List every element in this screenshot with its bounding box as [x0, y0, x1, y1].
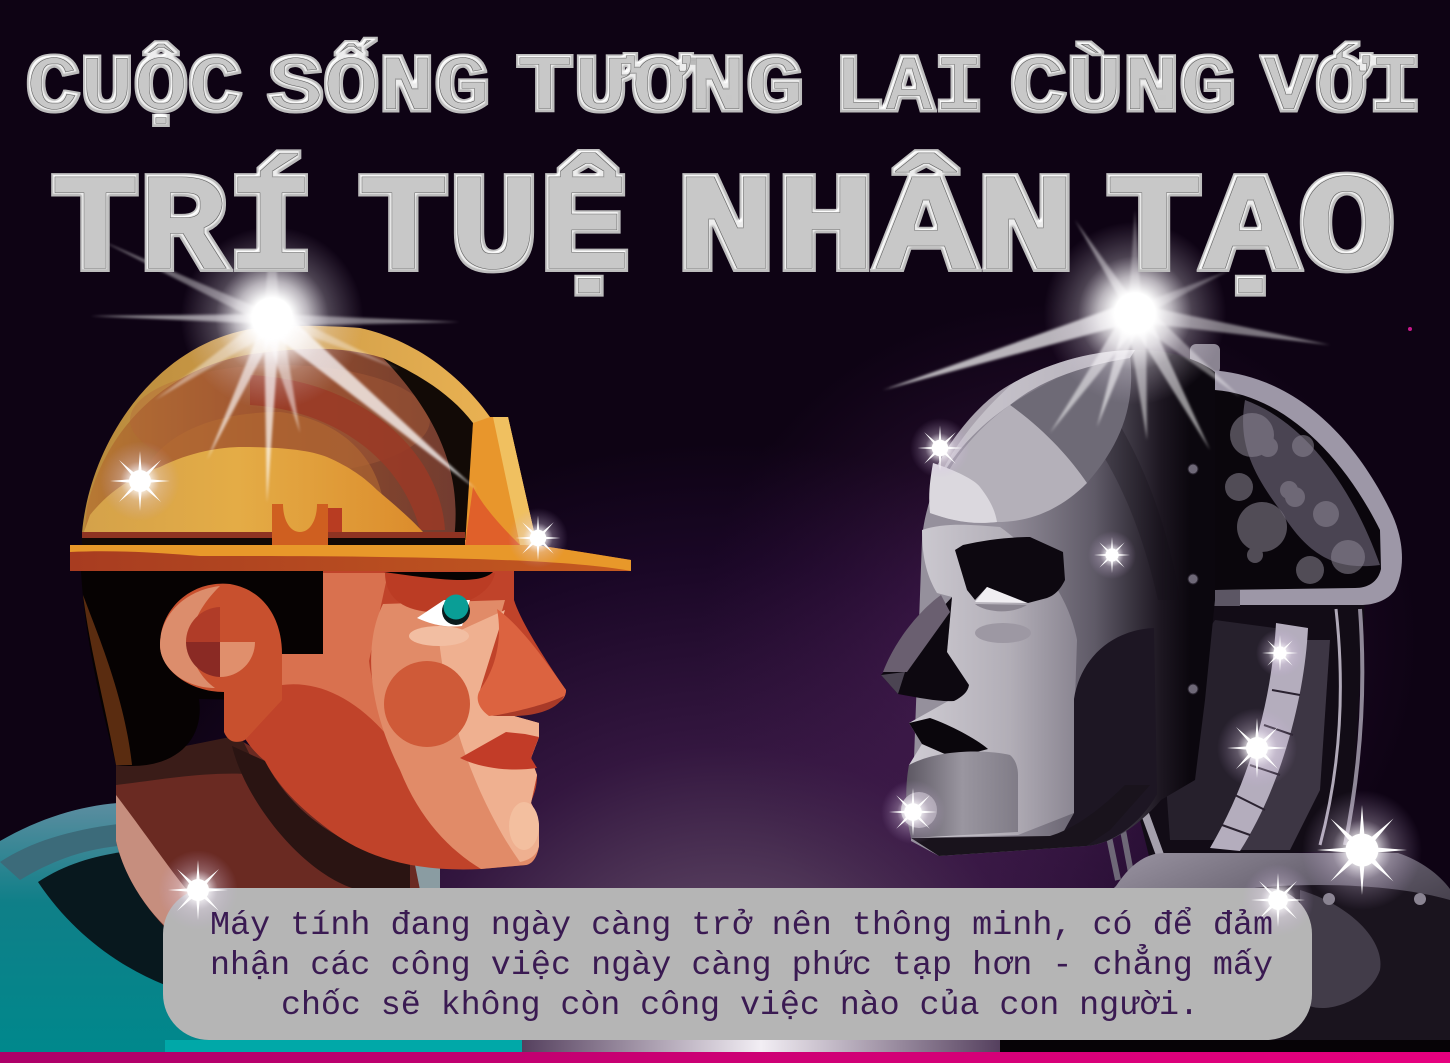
title: second line: NHÂN [676, 153, 1076, 310]
title: first line [26, 38, 1422, 135]
title: first line: VỚI [1262, 42, 1422, 135]
callout text [210, 906, 1273, 1025]
title: first line: LAI [834, 44, 984, 135]
sparkle stars [100, 418, 1422, 910]
illustration: robot [881, 344, 1450, 1052]
robot shoulder [1000, 853, 1450, 1052]
light flare: helmet [90, 200, 477, 503]
robot lens top [1010, 355, 1131, 483]
lips [460, 732, 539, 770]
robot helmet back [1190, 344, 1402, 606]
ear [160, 584, 282, 742]
bottom strip [522, 1040, 1450, 1052]
bottom pink bar [0, 1052, 1450, 1063]
title: second line: TUỆ [358, 154, 630, 310]
shirt [0, 803, 522, 1052]
callout text: chốc sẽ không còn công việc nào của con người. [281, 987, 1199, 1025]
callout text: Máy tính đang ngày càng trở nên thông minh, có để đảm [210, 906, 1273, 945]
robot bolts [934, 464, 1198, 853]
helmet buckle [272, 504, 342, 545]
eye [417, 600, 470, 627]
title: first line: SỐNG [268, 38, 490, 135]
callout panel [163, 888, 1312, 1040]
title: second line: TRÍ [51, 153, 315, 310]
title: second line [51, 153, 1395, 310]
robot forehead highlight [929, 463, 997, 523]
neck [116, 735, 420, 940]
title: second line: TẠO [1106, 154, 1395, 310]
light flare: robot head [883, 210, 1330, 450]
robot chin [906, 751, 1018, 838]
robot face panel [908, 525, 1077, 838]
robot head arc band [1060, 380, 1180, 600]
nose [478, 609, 566, 716]
robot nose [881, 595, 969, 701]
robot head base [911, 350, 1215, 856]
helmet [70, 326, 631, 571]
callout stars [158, 850, 1314, 936]
robot forehead rim [935, 350, 1135, 490]
title: first line: CÙNG [1010, 42, 1236, 135]
chin highlight [509, 802, 539, 850]
illustration: human worker [0, 326, 631, 1052]
purple glow behind robot [700, 300, 1420, 980]
title: first line: CUỘC [26, 42, 242, 135]
robot eye [955, 537, 1065, 643]
robot forehead [930, 405, 1087, 523]
robot cheek [1060, 628, 1157, 846]
title: first line: TƯƠNG [516, 44, 804, 135]
robot jaw rim [911, 785, 1150, 856]
callout text: nhận các công việc ngày càng phức tạp hơn - chẳng mấy [210, 944, 1273, 985]
hair [81, 571, 323, 766]
robot neck and spine [1108, 600, 1365, 880]
face [235, 571, 566, 869]
eyebrow [384, 572, 493, 580]
small magenta dot [1408, 327, 1412, 331]
robot mouth [909, 718, 988, 758]
helmet brim [70, 545, 631, 571]
